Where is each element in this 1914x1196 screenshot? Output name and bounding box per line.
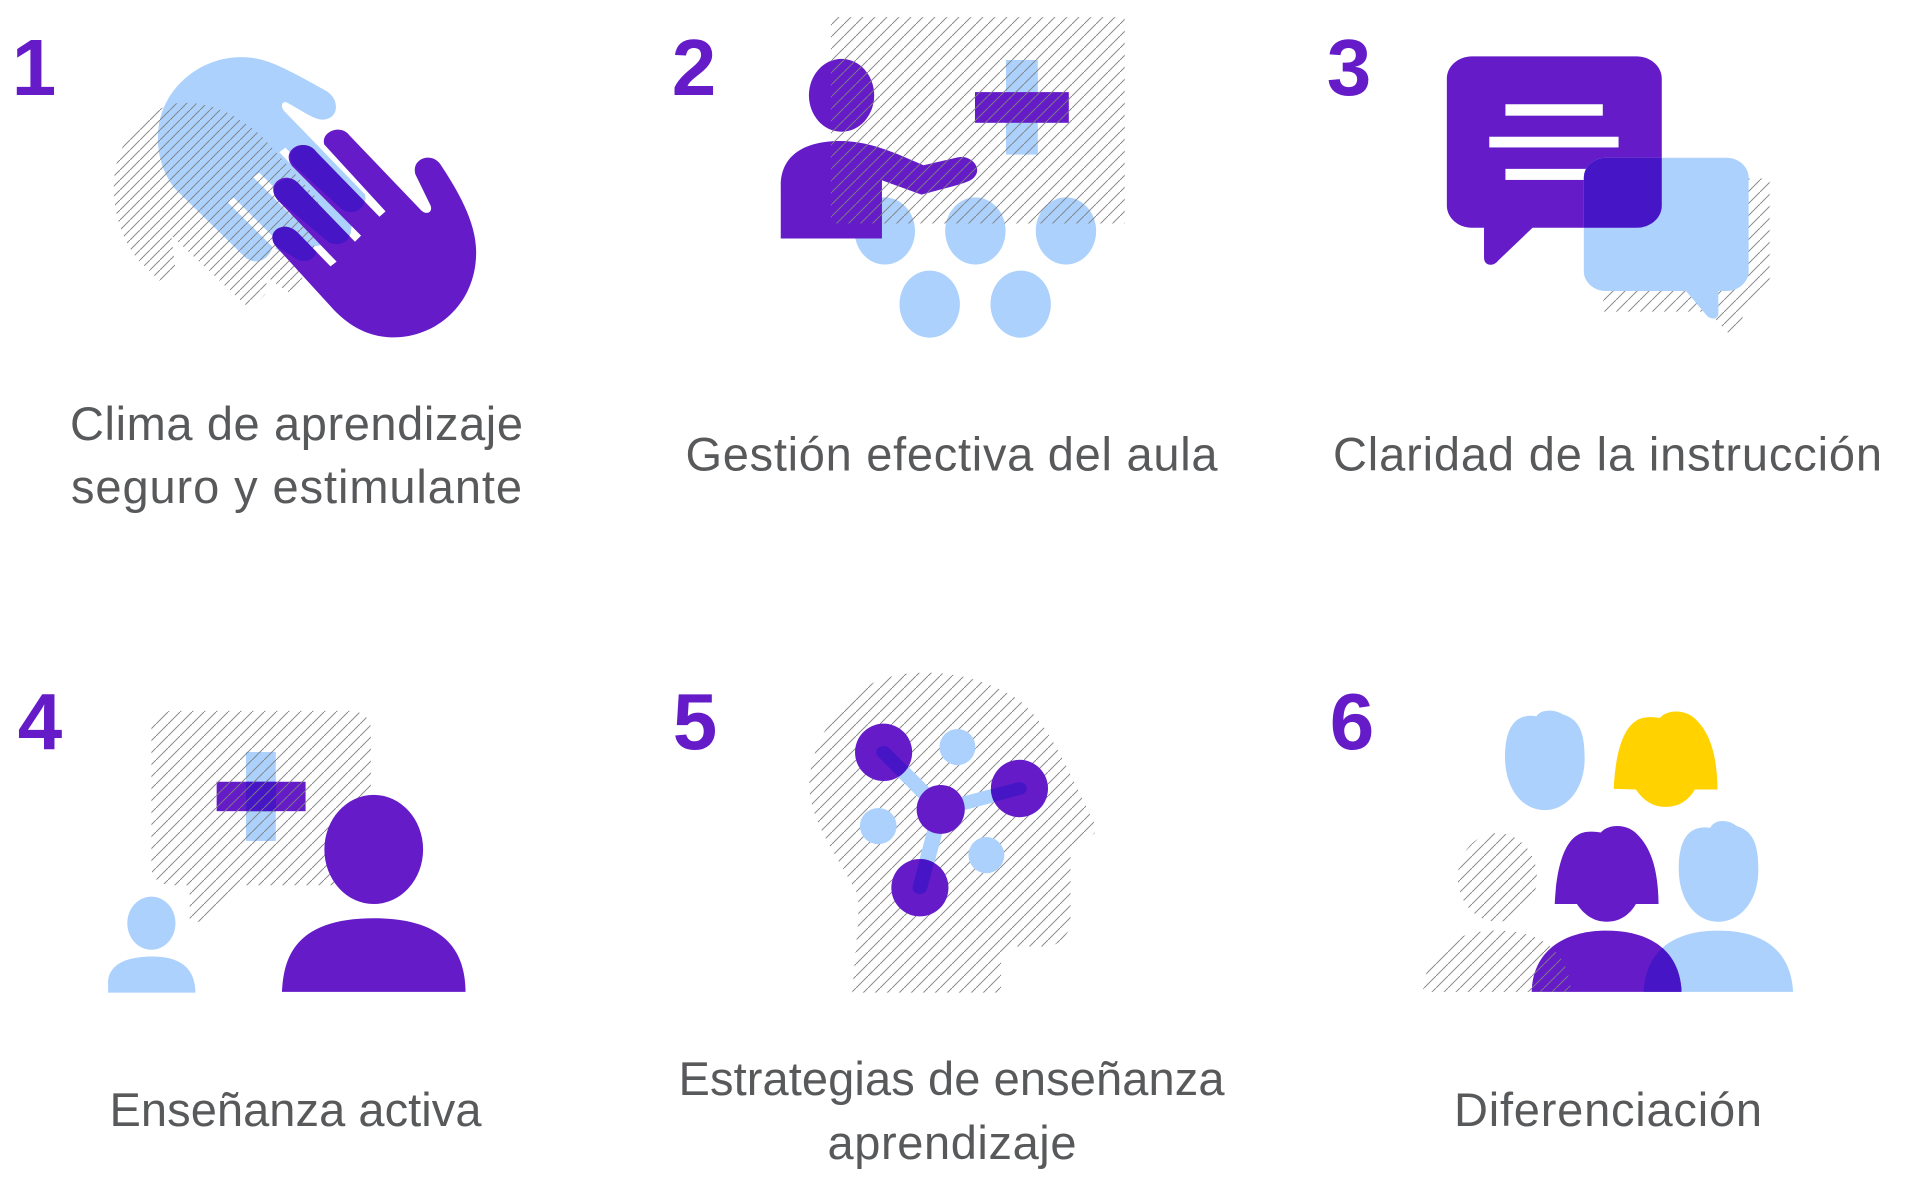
label: seguro y estimulante: [71, 460, 522, 513]
number 2: 2: [672, 23, 716, 112]
label: Estrategias de enseñanza: [678, 1052, 1225, 1105]
panel: 5 estrategias de enseñanza aprendizaje: [673, 673, 1225, 1169]
label: aprendizaje: [828, 1116, 1076, 1169]
panel: 3 claridad de la instrucción: [1327, 23, 1882, 480]
number 5: 5: [673, 677, 717, 766]
number 4: 4: [18, 677, 63, 766]
label: Clima de aprendizaje: [70, 397, 523, 450]
panel: 4 enseñanza activa: [18, 677, 482, 1136]
number 3: 3: [1327, 23, 1371, 112]
icon: head with network: [809, 673, 1095, 993]
icon: group of people: [1423, 711, 1793, 992]
label: Enseñanza activa: [110, 1083, 482, 1136]
icon: two hands: [114, 57, 476, 337]
label: Gestión efectiva del aula: [686, 428, 1218, 480]
number 1: 1: [12, 23, 56, 112]
label: Diferenciación: [1454, 1083, 1762, 1136]
panel: 6 diferenciación: [1330, 677, 1793, 1136]
icon: teacher and students: [781, 17, 1125, 338]
panel: 2 gestión del aula: [672, 17, 1218, 481]
icon: speech bubbles: [1447, 56, 1770, 337]
label: [70, 397, 523, 513]
panel: 1 clima de aprendizaje: [12, 23, 523, 513]
icon: teacher and student dialogue: [108, 711, 466, 993]
number 6: 6: [1330, 677, 1374, 766]
label: [678, 1052, 1225, 1169]
label: Claridad de la instrucción: [1333, 428, 1882, 480]
